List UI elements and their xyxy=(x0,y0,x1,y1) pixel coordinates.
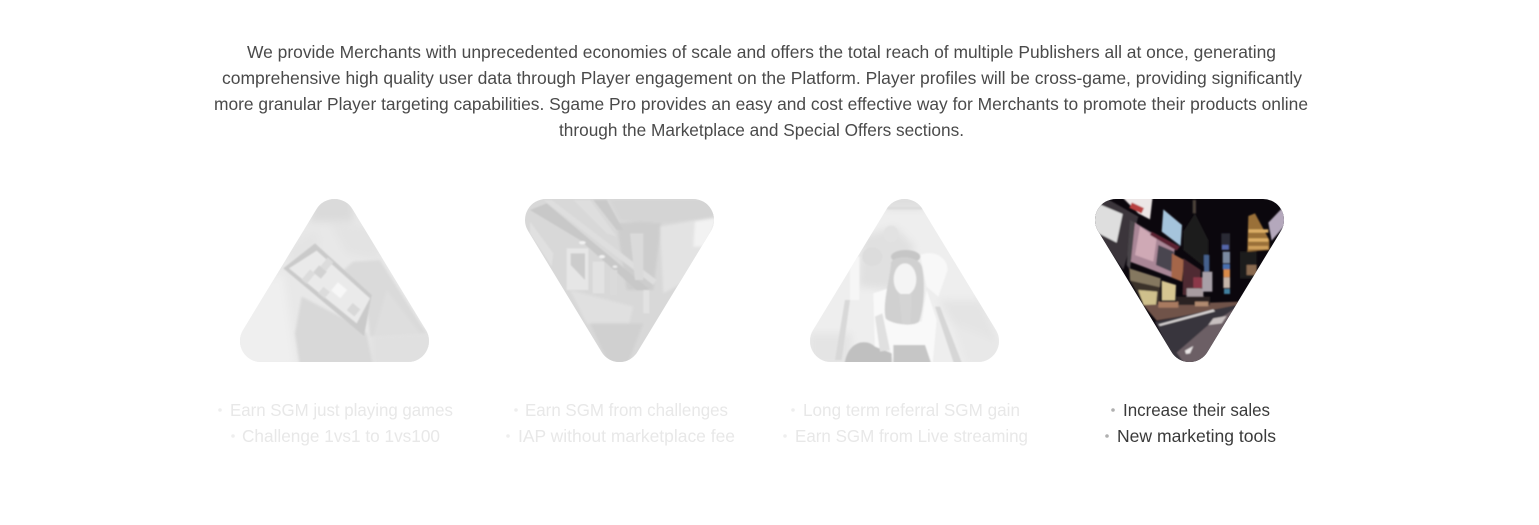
caption: merchants xyxy=(1105,400,1276,446)
panel: challenges and fees xyxy=(506,193,735,446)
caption: challenges and fees xyxy=(506,400,735,446)
caption: challenges and fees: IAP without marketplace fee xyxy=(518,426,735,446)
caption: referral and streaming: Earn SGM from Live streaming xyxy=(795,426,1028,446)
panel: merchants xyxy=(1090,193,1290,446)
caption: merchants: Increase their sales xyxy=(1123,400,1270,420)
infographic canvas xyxy=(215,45,1308,446)
intro paragraph: We provide Merchants with unprecedented economies of scale and offers the total reach of multiple Publishers all at once, generating xyxy=(247,42,1276,62)
intro paragraph xyxy=(214,42,1308,140)
image: city street at night xyxy=(1095,199,1284,362)
caption: referral and streaming xyxy=(783,400,1028,446)
caption: play and challenge: Challenge 1vs1 to 1vs100 xyxy=(242,426,440,446)
image: industrial interior xyxy=(525,199,714,362)
caption: merchants: New marketing tools xyxy=(1117,426,1276,446)
image: smiling girl xyxy=(810,199,999,362)
panel: play and challenge xyxy=(218,193,453,446)
image: hands holding a phone xyxy=(240,199,429,362)
caption: play and challenge xyxy=(218,400,453,446)
panel: referral and streaming xyxy=(783,193,1028,446)
caption: referral and streaming: Long term referral SGM gain xyxy=(803,400,1020,420)
intro paragraph: more granular Player targeting capabilities. Sgame Pro provides an easy and cost effective way for Merchants to promote their products online xyxy=(214,94,1308,114)
intro paragraph: through the Marketplace and Special Offers sections. xyxy=(559,120,964,140)
caption: play and challenge: Earn SGM just playing games xyxy=(230,400,453,420)
caption: challenges and fees: Earn SGM from challenges xyxy=(525,400,728,420)
intro paragraph: comprehensive high quality user data through Player engagement on the Platform. Player profiles will be cross-game, providing significantly xyxy=(222,68,1302,88)
